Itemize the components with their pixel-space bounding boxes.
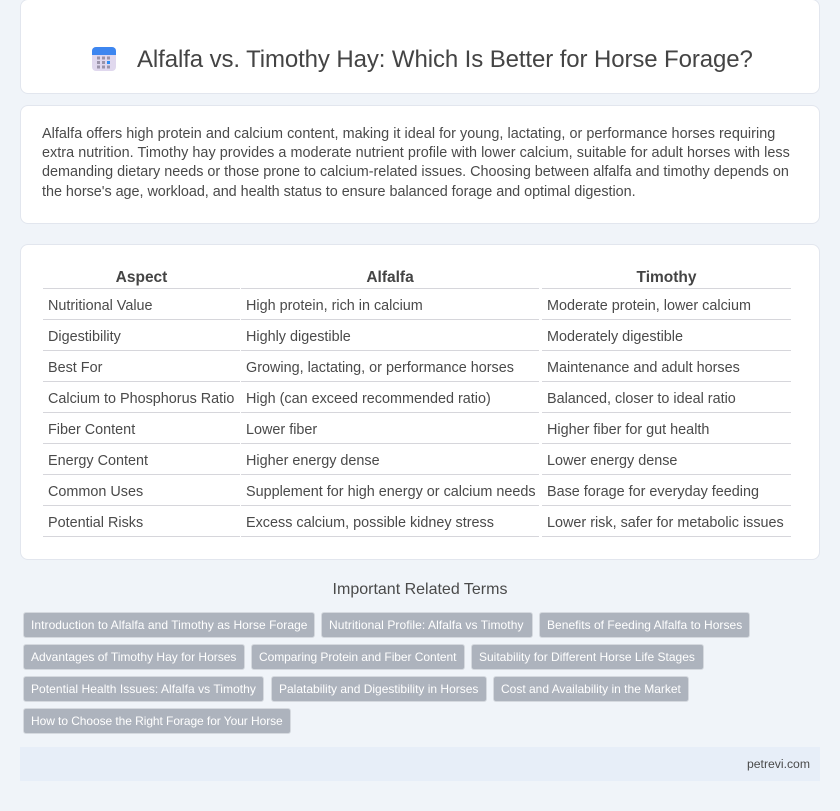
header panel xyxy=(20,0,820,94)
row: Energy Content: Lower energy dense xyxy=(547,453,677,469)
row: Nutritional Value: Moderate protein, lower calcium xyxy=(547,298,751,314)
row: Calcium to Phosphorus Ratio: High (can exceed recommended ratio) xyxy=(246,391,491,407)
intro paragraph: the horse's age, workload, and health status to ensure balanced forage and optimal digestion. xyxy=(42,184,636,200)
related terms heading: Important Related Terms xyxy=(333,581,507,598)
footer bar xyxy=(20,747,820,781)
row: Calcium to Phosphorus Ratio: Balanced, closer to ideal ratio xyxy=(547,391,736,407)
related term tags: Suitability for Different Horse Life Stages xyxy=(479,650,695,664)
row: Digestibility: Moderately digestible xyxy=(547,329,683,345)
row: Common Uses: Common Uses xyxy=(48,484,143,500)
row: Calcium to Phosphorus Ratio xyxy=(48,391,736,407)
row: Best For: Best For xyxy=(48,360,102,376)
row: Common Uses: Base forage for everyday feeding xyxy=(547,484,759,500)
footer source: petrevi.com xyxy=(747,757,810,771)
intro paragraph: demanding dietary needs or those prone to calcium-related issues. Choosing between alfalfa and timothy depends on xyxy=(42,164,789,180)
related term tags: Cost and Availability in the Market xyxy=(501,682,681,696)
row: Calcium to Phosphorus Ratio: Calcium to Phosphorus Ratio xyxy=(48,391,234,407)
table header: Alfalfa xyxy=(366,269,414,286)
icon: calendar xyxy=(92,47,116,71)
row: Fiber Content: Lower fiber xyxy=(246,422,317,438)
related term tags xyxy=(23,612,750,734)
row: Fiber Content: Higher fiber for gut health xyxy=(547,422,709,438)
row: Common Uses: Supplement for high energy or calcium needs xyxy=(246,484,536,500)
related term tags: How to Choose the Right Forage for Your Horse xyxy=(31,714,283,728)
row: Digestibility: Digestibility xyxy=(48,329,121,345)
row: Energy Content: Energy Content xyxy=(48,453,148,469)
row: Nutritional Value xyxy=(48,298,751,314)
table header xyxy=(116,269,696,286)
title: Alfalfa vs. Timothy Hay: Which Is Better for Horse Forage? xyxy=(137,46,753,73)
row: Best For xyxy=(48,360,740,376)
related term tags: Palatability and Digestibility in Horses xyxy=(279,682,478,696)
intro paragraph: extra nutrition. Timothy hay provides a moderate nutrient profile with lower calcium, suitable for adult horses with less xyxy=(42,145,790,161)
row: Potential Risks: Lower risk, safer for metabolic issues xyxy=(547,515,784,531)
row: Potential Risks xyxy=(48,515,784,531)
row: Fiber Content xyxy=(48,422,709,438)
related term tags: Potential Health Issues: Alfalfa vs Timothy xyxy=(31,682,256,696)
row: Best For: Growing, lactating, or performance horses xyxy=(246,360,514,376)
related term tags: Comparing Protein and Fiber Content xyxy=(259,650,456,664)
intro text panel xyxy=(20,105,820,224)
row: Nutritional Value: Nutritional Value xyxy=(48,298,153,314)
related term tags: Benefits of Feeding Alfalfa to Horses xyxy=(547,618,742,632)
related term tags: Nutritional Profile: Alfalfa vs Timothy xyxy=(329,618,524,632)
table header: Aspect xyxy=(116,269,167,286)
row: Fiber Content: Fiber Content xyxy=(48,422,135,438)
row: Energy Content: Higher energy dense xyxy=(246,453,380,469)
row: Digestibility: Highly digestible xyxy=(246,329,351,345)
intro paragraph xyxy=(42,126,790,200)
row: Digestibility xyxy=(48,329,683,345)
row: Common Uses xyxy=(48,484,759,500)
row: Nutritional Value: High protein, rich in calcium xyxy=(246,298,423,314)
intro paragraph: Alfalfa offers high protein and calcium content, making it ideal for young, lactating, or performance horses requiring xyxy=(42,126,775,142)
row: Potential Risks: Potential Risks xyxy=(48,515,143,531)
comparison table panel xyxy=(20,244,820,560)
related term tags: Advantages of Timothy Hay for Horses xyxy=(31,650,236,664)
row: Energy Content xyxy=(48,453,677,469)
related term tags: Introduction to Alfalfa and Timothy as Horse Forage xyxy=(31,618,308,632)
table header: Timothy xyxy=(636,269,696,286)
row: Potential Risks: Excess calcium, possible kidney stress xyxy=(246,515,494,531)
row: Best For: Maintenance and adult horses xyxy=(547,360,740,376)
